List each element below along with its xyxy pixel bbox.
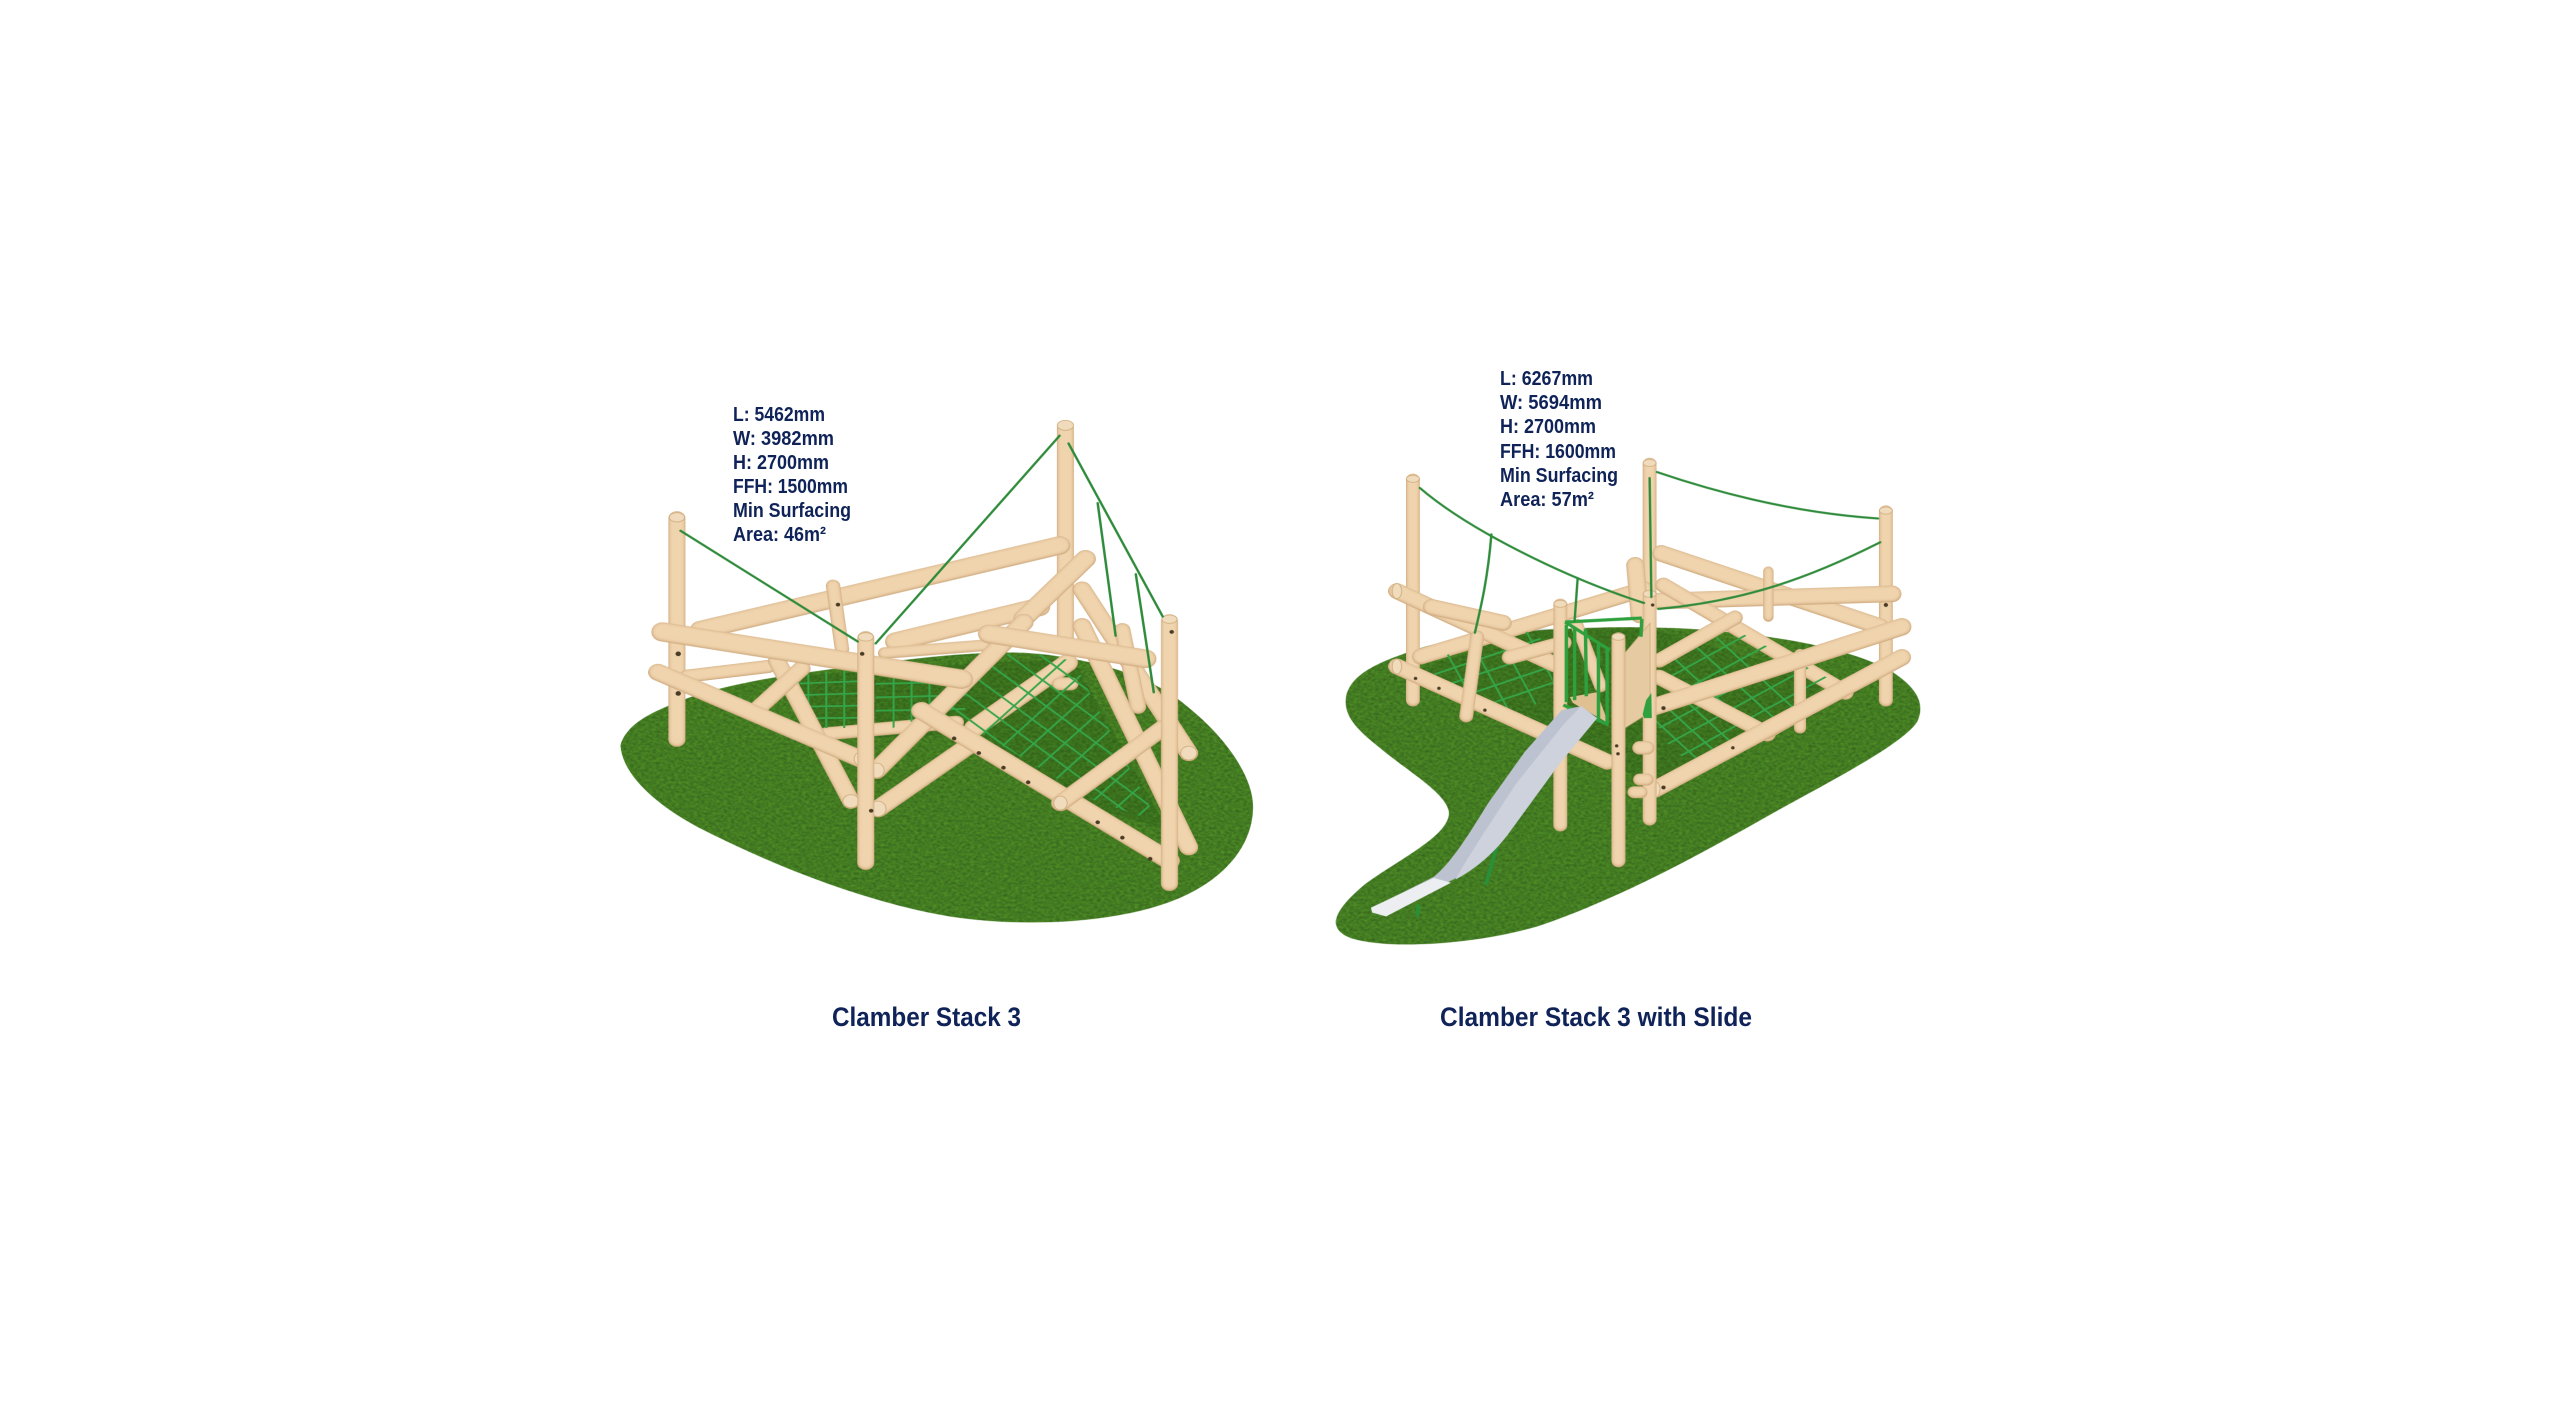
green tower frame (1563, 618, 1642, 725)
climbing nets (1416, 621, 1859, 776)
specifications text: Min Surfacing (733, 500, 851, 522)
specifications text: FFH: 1500mm (733, 476, 848, 498)
panel: Clamber Stack 3 (620, 404, 1311, 1032)
specifications text (733, 404, 851, 546)
platform and inner sloped log (1570, 625, 1608, 723)
illustration: clamber stack with slide on grass (1336, 459, 1920, 944)
specifications text: L: 5462mm (733, 404, 825, 426)
specifications text: Area: 46m² (733, 524, 826, 546)
grass surfacing (620, 653, 1253, 923)
caption: Clamber Stack 3 (832, 1002, 1021, 1032)
specifications text: L: 6267mm (1500, 368, 1593, 390)
timber side panel (1625, 623, 1650, 728)
specifications text: W: 3982mm (733, 428, 834, 450)
ropes (680, 436, 1163, 692)
back timbers (669, 420, 1197, 847)
panel: Clamber Stack 3 with Slide (1336, 368, 1920, 1032)
specifications text (1500, 368, 1618, 511)
specifications text: Min Surfacing (1500, 465, 1618, 487)
illustration: clamber stack on grass (620, 420, 1311, 923)
specifications text: FFH: 1600mm (1500, 441, 1616, 463)
green bracket (1643, 693, 1652, 718)
specifications text: W: 5694mm (1500, 392, 1602, 414)
slide supports (1417, 847, 1497, 916)
metal slide (1371, 706, 1597, 916)
specifications text: H: 2700mm (1500, 416, 1596, 438)
caption: Clamber Stack 3 with Slide (1440, 1002, 1752, 1032)
specifications text: H: 2700mm (733, 452, 829, 474)
front timbers (658, 603, 1177, 884)
front timbers (1392, 584, 1902, 861)
grass surfacing (1336, 627, 1920, 944)
climbing net (648, 622, 1157, 864)
specifications text: Area: 57m² (1500, 489, 1594, 511)
back timbers (1406, 459, 1892, 700)
ropes (1420, 472, 1880, 633)
